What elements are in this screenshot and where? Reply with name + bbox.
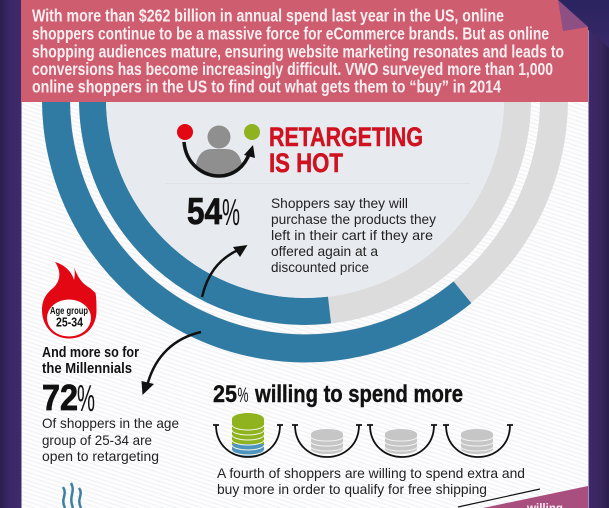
heading: and more so for the millennials: [42, 345, 139, 377]
bottom right ribbon: [458, 486, 588, 508]
chart: concentric progress rings: [56, 0, 554, 348]
text: a fourth of shoppers: [217, 465, 525, 497]
text: shoppers say: Shoppers say they will: [271, 195, 408, 211]
stat: 54 percent: 54: [187, 191, 222, 232]
green dot: [244, 124, 260, 140]
stat: 54 percent: %: [222, 192, 240, 233]
outer ring track: [56, 0, 554, 348]
white circle: [47, 300, 91, 336]
coin separators: [232, 425, 264, 455]
text: shoppers say: [271, 195, 436, 275]
ribbon line: [458, 489, 540, 507]
text: a fourth of shoppers: A fourth of shoppers are willing to spend extra and: [217, 465, 525, 481]
text: shoppers say: purchase the products they: [271, 211, 436, 227]
banner text: With more than $262 billion in annual spend last year in the US, online: [32, 6, 504, 26]
text: shoppers say: discounted price: [271, 259, 369, 275]
heading: 25 percent willing to spend more: 25: [213, 381, 237, 408]
text: shoppers 25-34: group of 25-34 are: [42, 432, 152, 448]
stat: 72 percent: %: [77, 378, 95, 419]
heading: 25 percent willing to spend more: willing to spend more: [254, 381, 463, 408]
text: shoppers 25-34: open to retargeting: [42, 448, 159, 464]
bowl outline: [213, 425, 283, 457]
heading: retargeting is hot: [269, 122, 423, 178]
heading: 25 percent willing to spend more: %: [238, 384, 248, 407]
outer ring blue value: [56, 99, 463, 348]
heading: and more so for the millennials: the Millennials: [42, 361, 132, 377]
arrow: up to 54 percent: [202, 245, 248, 297]
icon: person with retargeting arrow: [177, 124, 260, 176]
inner ring track: [92, 0, 518, 312]
inner light circle: [106, 0, 504, 298]
heading: retargeting is hot: RETARGETING: [269, 122, 423, 152]
heading: and more so for the millennials: And more so for: [42, 345, 139, 361]
curved arrow line: [184, 142, 250, 176]
heading: retargeting is hot: IS HOT: [269, 148, 343, 178]
text: shoppers 25-34: Of shoppers in the age: [42, 415, 179, 431]
person body: [195, 149, 243, 176]
icon: flame badge age group: [42, 262, 96, 338]
bowl 2 with grey stack: [292, 425, 362, 457]
banner fold: [558, 0, 588, 31]
flame shape: [42, 262, 96, 338]
text: shoppers 25-34: [42, 415, 179, 464]
bowl 4 with grey stack: [443, 425, 513, 457]
banner text: [32, 6, 564, 96]
bowl 1 with coloured stack: [213, 413, 283, 457]
red dot: [177, 124, 193, 140]
bowl 3 with grey stack: [367, 425, 437, 457]
text: shoppers say: left in their cart if they are: [271, 227, 433, 243]
dark corner behind fold: [555, 0, 609, 48]
text: a fourth of shoppers: buy more in order to qualify for free shipping: [217, 481, 487, 497]
green coins: [232, 413, 264, 445]
icon: steam: [63, 483, 81, 508]
age range label: 25-34: [56, 316, 83, 330]
intro banner: [21, 0, 609, 102]
banner shape: [21, 0, 588, 102]
divider: [165, 183, 470, 184]
left purple side band: [0, 0, 22, 508]
age group label: Age group: [50, 305, 88, 317]
stat: 72 percent: 72: [42, 377, 78, 418]
right purple side band: [588, 0, 609, 508]
arrow head: [244, 145, 255, 158]
inner ring blue value: [92, 99, 330, 311]
person head: [208, 126, 230, 148]
blue coins: [232, 444, 264, 456]
arrow: down to millennials: [142, 332, 201, 395]
banner text: online shoppers in the US to find out what gets them to “buy” in 2014: [32, 76, 501, 96]
text: shoppers say: offered again at a: [271, 243, 378, 259]
